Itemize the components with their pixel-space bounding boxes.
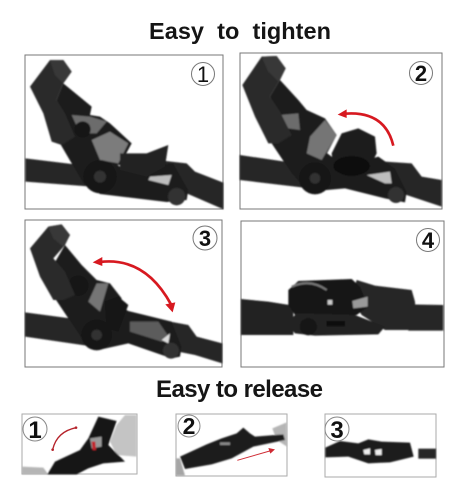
number badge 4: 4 [422, 228, 435, 253]
red arrow: step 2 [338, 109, 393, 146]
number badge 1: 1 [28, 417, 42, 444]
panel: step 4 [241, 221, 444, 367]
panel: step 3 [25, 220, 222, 367]
number badge 1: 1 [197, 62, 209, 87]
number badge 2: 2 [415, 61, 427, 86]
separated ratchet: release step 3 [325, 439, 436, 463]
panel: step 2 [240, 53, 442, 209]
panel: step 1 [25, 55, 223, 209]
red double-headed arrow: step 3 [93, 257, 175, 312]
ratchet and hands: release step 1 [22, 415, 137, 474]
number badge 2: 2 [183, 413, 195, 439]
title: Easy to tighten: Easy to tighten [149, 18, 331, 44]
number badge 3: 3 [199, 226, 211, 251]
number badge 2 [410, 61, 432, 86]
number badge 4 [416, 228, 440, 253]
ratchet illustration: step 4 [241, 279, 443, 336]
heading: Easy to release: Easy to release [156, 376, 323, 403]
red arrow: release step 2 [237, 448, 275, 460]
number badge 1 [192, 62, 214, 87]
ratchet and hands: release step 2 [176, 422, 287, 476]
panel: release step 1 [22, 414, 137, 474]
panel: release step 2 [176, 413, 287, 476]
number badge 3: 3 [330, 417, 344, 444]
ratchet illustration: step 3 [25, 224, 222, 363]
number badge 3 [193, 226, 217, 251]
panel: release step 3 [325, 414, 436, 477]
ratchet illustration: step 1 [25, 60, 223, 209]
ratchet illustration: step 2 [240, 56, 442, 207]
red arrow: release step 1 [51, 426, 77, 451]
